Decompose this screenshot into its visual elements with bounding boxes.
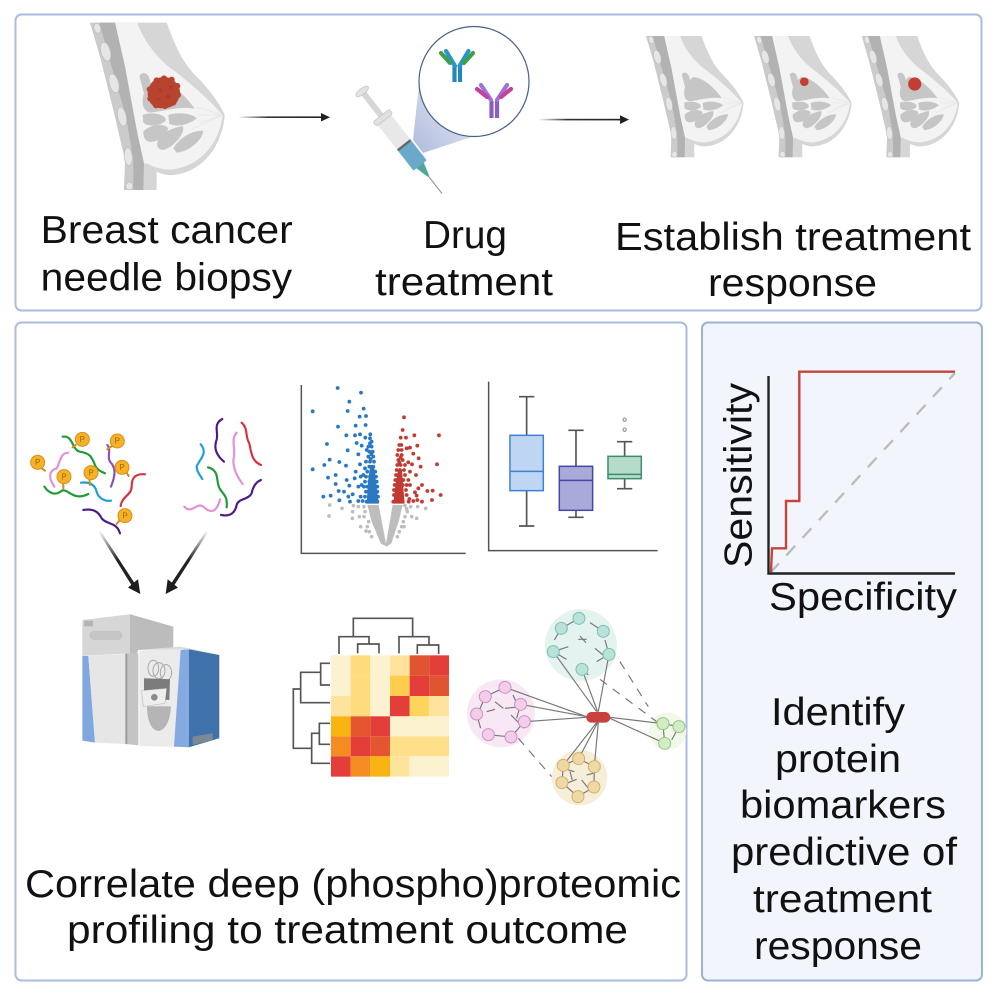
caption: identify protein biomarkers: predictive of bbox=[731, 831, 957, 874]
icon: phosphopeptides: P bbox=[119, 463, 125, 472]
arrows: peptides into mass spectrometer bbox=[99, 531, 208, 594]
caption: correlate proteomic profiling bbox=[25, 863, 681, 952]
caption: identify protein biomarkers bbox=[731, 691, 957, 968]
panel: treatment workflow bbox=[16, 14, 982, 310]
caption: identify protein biomarkers: treatment bbox=[753, 878, 932, 921]
hub node bbox=[586, 712, 610, 723]
label: breast cancer needle biopsy: Breast cancer bbox=[41, 209, 293, 252]
chart: clustered heatmap bbox=[293, 618, 449, 777]
heatmap cells bbox=[331, 655, 449, 777]
caption: identify protein biomarkers: Identify bbox=[771, 691, 906, 734]
icon: breast with large tumor bbox=[90, 23, 225, 190]
cluster backgrounds bbox=[467, 609, 686, 805]
chart: protein interaction network bbox=[467, 609, 686, 805]
box 1 bbox=[510, 397, 543, 526]
icon: breast small residual tumor bbox=[754, 36, 852, 157]
icon: phosphopeptides: P bbox=[88, 468, 94, 477]
arrow: biopsy to drug bbox=[238, 113, 330, 122]
caption: identify protein biomarkers: protein bbox=[775, 738, 901, 781]
icon: mass spectrometer bbox=[82, 614, 219, 747]
gray non-significant dots bbox=[329, 505, 426, 547]
icon: phosphopeptides bbox=[31, 432, 145, 533]
label: drug treatment: Drug bbox=[423, 214, 507, 257]
panel: protein biomarkers bbox=[702, 322, 982, 980]
caption: correlate proteomic profiling: profiling to treatment outcome bbox=[67, 909, 628, 952]
icon: unmodified peptides bbox=[184, 419, 261, 515]
label: breast cancer needle biopsy bbox=[41, 209, 293, 300]
y axis label: Sensitivity bbox=[718, 382, 760, 568]
axes bbox=[768, 376, 955, 574]
label: establish treatment response bbox=[615, 216, 971, 305]
chart: box plots bbox=[489, 382, 658, 551]
arrow: drug to response bbox=[538, 115, 629, 124]
icon: blue-green antibody bbox=[441, 51, 473, 82]
dendrogram: columns bbox=[339, 618, 439, 654]
dendrogram: rows bbox=[293, 663, 330, 763]
chart: ROC curve bbox=[718, 372, 958, 619]
ROC step curve bbox=[771, 372, 955, 572]
icon: phosphopeptides: P bbox=[61, 472, 67, 481]
icon: syringe bbox=[352, 83, 450, 200]
icon: phosphopeptides: P bbox=[80, 435, 85, 444]
box 3 bbox=[608, 418, 641, 489]
teal cluster nodes bbox=[547, 612, 615, 675]
blue down-regulated dots bbox=[313, 388, 379, 504]
label: establish treatment response: Establish treatment bbox=[615, 216, 971, 259]
label: establish treatment response: response bbox=[708, 262, 877, 305]
magnifier cone bbox=[413, 80, 473, 153]
diagonal reference line bbox=[770, 373, 955, 573]
green cluster nodes bbox=[657, 718, 685, 749]
network edges bbox=[477, 618, 679, 797]
label: breast cancer needle biopsy: needle biopsy bbox=[41, 256, 293, 300]
chart: volcano plot bbox=[301, 385, 466, 553]
icon: phosphopeptides: P bbox=[35, 458, 40, 467]
red up-regulated dots bbox=[393, 417, 441, 504]
box 2 bbox=[559, 430, 593, 517]
x axis label: Specificity bbox=[769, 576, 958, 619]
icon: breast medium residual tumor bbox=[862, 36, 959, 157]
panel: proteomic profiling bbox=[16, 322, 686, 980]
caption: identify protein biomarkers: biomarkers bbox=[740, 784, 946, 827]
callout circle: antibodies bbox=[419, 26, 529, 136]
icon: phosphopeptides: P bbox=[122, 511, 128, 520]
icon: purple-pink antibody bbox=[477, 85, 511, 118]
pink cluster nodes bbox=[471, 681, 530, 743]
icon: phosphopeptides: P bbox=[115, 437, 120, 446]
label: drug treatment: treatment bbox=[375, 261, 553, 304]
icon: breast no residual tumor bbox=[646, 36, 744, 157]
label: drug treatment bbox=[375, 214, 553, 304]
caption: correlate proteomic profiling: Correlate deep (phospho)proteomic bbox=[25, 863, 681, 906]
caption: identify protein biomarkers: response bbox=[754, 925, 922, 968]
yellow cluster nodes bbox=[556, 753, 600, 803]
